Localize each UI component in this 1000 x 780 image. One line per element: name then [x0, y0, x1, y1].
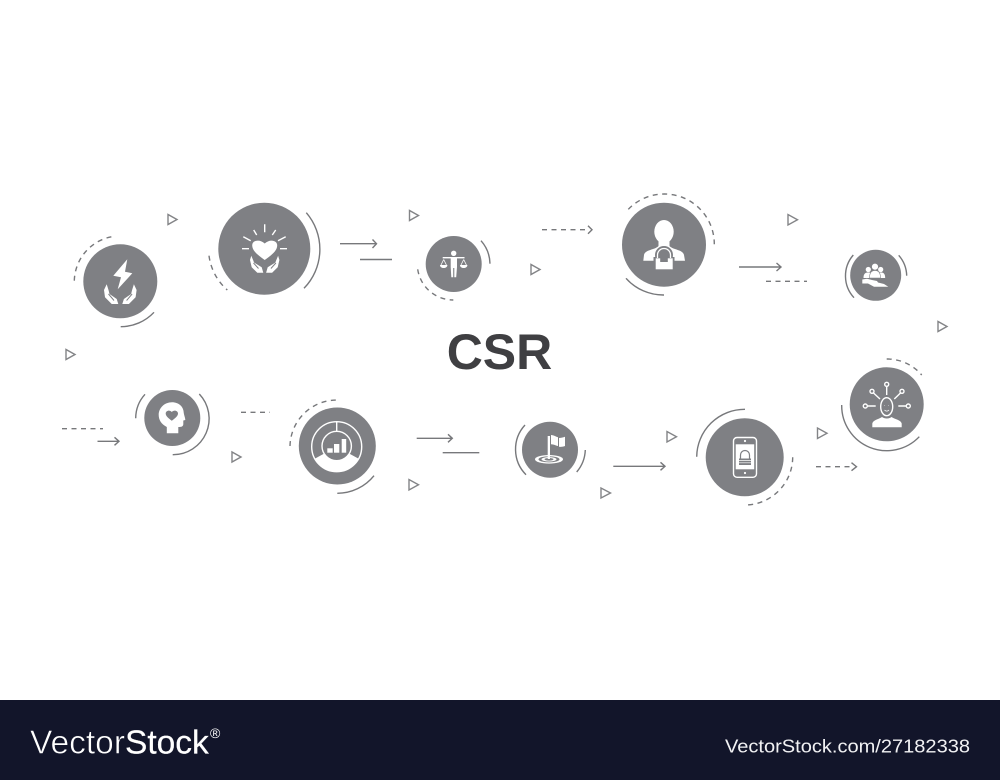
arrows and connectors [62, 226, 856, 471]
step: chart gauge [290, 400, 376, 493]
registered mark: ® [210, 725, 221, 741]
triangle markers [66, 210, 947, 498]
icon: flag in target [535, 435, 565, 464]
footer logo: VectorStock [30, 724, 209, 762]
step: people in hand [845, 250, 907, 301]
step: heart in hands [209, 203, 320, 295]
icon: lightning bolt and hands [104, 259, 137, 304]
icon: group on open hand [862, 264, 888, 287]
icon: person with connected nodes [863, 382, 910, 427]
icon: locked smartphone [734, 438, 756, 477]
icon: donut chart with bars [312, 422, 362, 472]
icon: radiant heart and hands [242, 224, 287, 273]
icon: person with scales [440, 251, 467, 277]
step: phone with lock [697, 409, 793, 505]
step: head with heart [136, 390, 209, 455]
icon: user silhouette with padlock [643, 220, 685, 271]
step: person network [842, 359, 924, 451]
icon: profile head with heart [159, 402, 185, 433]
step: flag on target [516, 422, 585, 478]
footer image id: VectorStock.com/27182338 [725, 736, 970, 757]
footer band [0, 700, 1000, 780]
step: energy in hands [74, 237, 157, 327]
title: CSR [447, 324, 552, 380]
step: person with lock [622, 194, 714, 295]
step: balance scale [418, 236, 490, 300]
